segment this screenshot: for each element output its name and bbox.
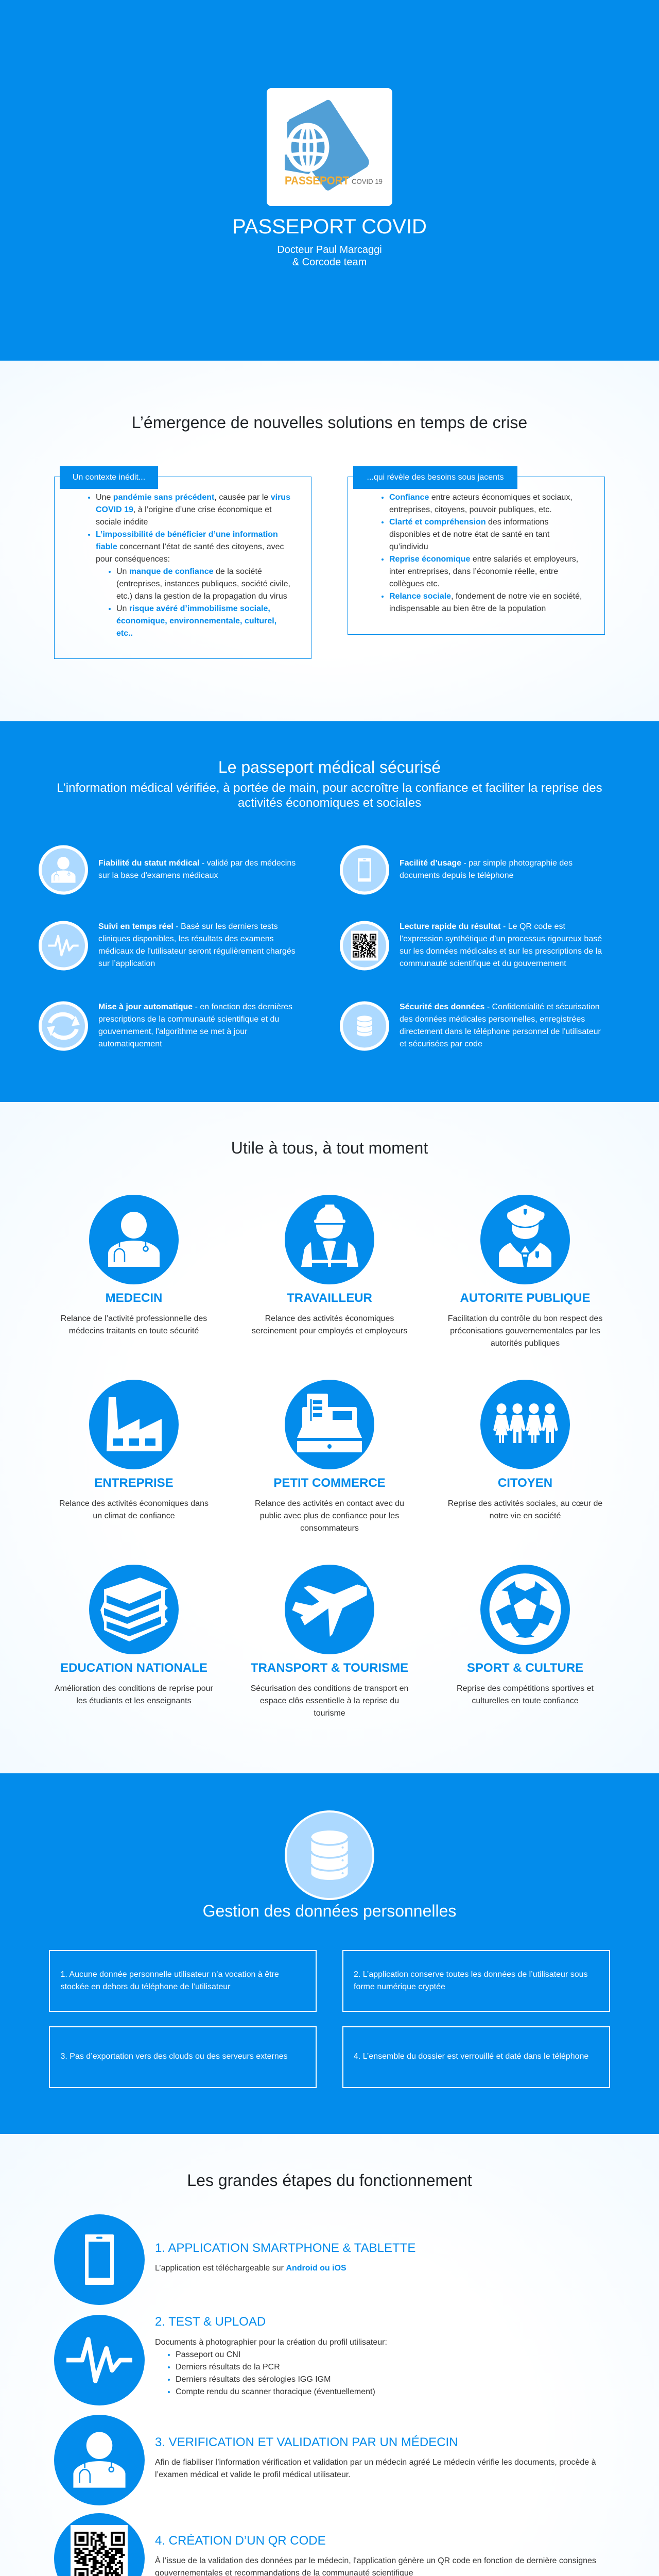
icon: usine — [89, 1380, 179, 1469]
panel: besoins — [348, 477, 605, 635]
description: public avec plus de confiance pour les — [260, 1512, 399, 1520]
panel: étapes — [0, 2134, 659, 2576]
step 4 text: À l’issue de la validation des données par le médecin, l'application génère un QR code en fonction de dernière consignes — [155, 2556, 596, 2565]
description — [448, 1499, 602, 1520]
step 3 text: Afin de fiabiliser l’information vérification et validation par un médecin agréé Le médecin vérifie les documents, procède à — [155, 2458, 596, 2467]
text 4: 4. L’ensemble du dossier est verrouillé et daté dans le téléphone — [354, 2052, 588, 2061]
title: MEDECIN — [106, 1291, 162, 1305]
panel: contexte — [54, 477, 311, 659]
title: PASSEPORT COVID — [232, 215, 427, 238]
card: sport et culture — [438, 1565, 613, 1699]
card: éducation nationale — [55, 1565, 213, 1705]
text 3: 3. Pas d’exportation vers des clouds ou des serveurs externes — [61, 2052, 288, 2061]
list: besoins: Confiance entre acteurs économiques et sociaux, — [389, 493, 573, 502]
list: besoins: Relance sociale, fondement de notre vie en société, — [389, 592, 582, 601]
panel: nouvelles solutions — [0, 361, 659, 721]
title: AUTORITE PUBLIQUE — [460, 1291, 590, 1305]
list: besoins: disponibles et de notre état de santé en tant — [389, 530, 549, 539]
description: tourisme — [314, 1709, 345, 1718]
list: besoins: inter entreprises, dans l’économie réelle, entre — [389, 567, 558, 576]
icon: base de données — [284, 1810, 375, 1900]
subtitle: & Corcode team — [292, 257, 367, 268]
label: besoins: ...qui révèle des besoins sous jacents — [367, 473, 504, 482]
icon: téléphone — [340, 845, 389, 894]
logo card — [267, 88, 392, 206]
step 1 text: L’application est téléchargeable sur Android ou iOS — [155, 2264, 346, 2273]
list: besoins — [381, 493, 582, 613]
text: suivi: cliniques disponibles, les résultats des examens — [98, 935, 274, 943]
list: contexte: Une pandémie sans précédent, causée par le virus — [96, 493, 290, 502]
card: médecin — [61, 1195, 207, 1335]
text: suivi: Suivi en temps réel - Basé sur les derniers tests — [98, 922, 278, 931]
description: Relance des activités économiques dans — [59, 1499, 209, 1508]
text 2: 2. L’application conserve toutes les données de l’utilisateur sous — [354, 1970, 588, 1979]
text: lecture: communauté scientifique et du gouvernement — [400, 959, 566, 968]
card: autorité publique — [448, 1195, 602, 1348]
card: transport et tourisme — [251, 1565, 408, 1718]
text 1 — [61, 1969, 279, 1993]
description — [438, 1683, 613, 1707]
text: lecture — [400, 922, 602, 968]
heading: L’émergence de nouvelles solutions en temps de crise — [132, 413, 527, 432]
text: fiabilité: sur la base d'examens médicaux — [98, 871, 218, 880]
heading: Gestion des données personnelles — [203, 1902, 456, 1920]
description: consommateurs — [300, 1524, 359, 1533]
icon: policier — [480, 1195, 570, 1284]
list: contexte: etc.) dans la gestion de la propagation du virus — [116, 592, 287, 601]
step 2 text: Derniers résultats des sérologies IGG IGM — [176, 2375, 331, 2384]
step 2 text — [155, 2336, 387, 2398]
text: fiabilité — [98, 859, 296, 880]
description: Facilitation du contrôle du bon respect des — [448, 1314, 602, 1323]
label: besoins — [353, 466, 517, 489]
panel: gestion des données — [0, 1773, 659, 2134]
description: préconisations gouvernementales par les — [450, 1327, 600, 1335]
icon: livres — [89, 1565, 179, 1654]
heading: Utile à tous, à tout moment — [231, 1139, 428, 1157]
text: fiabilité: Fiabilité du statut médical - validé par des médecins — [98, 859, 296, 868]
logo card: PASSEPORT — [285, 174, 350, 187]
icon: smartphone — [54, 2214, 145, 2305]
list: besoins: Reprise économique entre salariés et employeurs, — [389, 555, 578, 564]
description — [242, 1683, 417, 1720]
icon: QR code — [54, 2513, 145, 2576]
card: travailleur — [252, 1195, 407, 1335]
box 1 — [49, 1950, 317, 2012]
icon: pouls — [39, 921, 88, 971]
subheading: activités économiques et sociales — [238, 796, 421, 810]
description — [448, 1314, 602, 1348]
subtitle — [277, 244, 382, 268]
description: autorités publiques — [491, 1339, 560, 1348]
list: contexte — [88, 493, 290, 638]
step 2 text: Derniers résultats de la PCR — [176, 2363, 280, 2371]
step 4 text — [155, 2555, 596, 2576]
step 2 title: 2. TEST & UPLOAD — [155, 2315, 266, 2329]
subheading: L’information médical vérifiée, à portée de main, pour accroître la confiance et faciliter la reprise des — [57, 781, 602, 795]
text: sécurité: des données médicales personnelles, enregistrées — [400, 1015, 585, 1024]
text 1: stockée en dehors du téléphone de l’utilisateur — [61, 1982, 231, 1991]
icon: base de données — [340, 1002, 389, 1051]
list: contexte: pour conséquences: — [96, 555, 170, 564]
list: contexte: sociale inédite — [96, 518, 148, 527]
card: citoyen — [448, 1380, 602, 1520]
text: suivi: sur l’application — [98, 959, 155, 968]
title: EDUCATION NATIONALE — [60, 1661, 207, 1675]
text: mise à jour: Mise à jour automatique - en fonction des dernières — [98, 1003, 292, 1011]
text 2 — [354, 1969, 588, 1993]
icon: citoyens — [480, 1380, 570, 1469]
list: contexte: Un manque de confiance de la société — [116, 567, 262, 576]
title: TRAVAILLEUR — [287, 1291, 372, 1305]
heading: Le passeport médical sécurisé — [218, 758, 441, 776]
text: mise à jour — [98, 1003, 292, 1048]
panel: utile à tous — [0, 1102, 659, 1773]
step 4 title: 4. CRÉATION D’UN QR CODE — [155, 2534, 326, 2548]
icon: caisse enregistreuse — [285, 1380, 374, 1469]
description: un climat de confiance — [93, 1512, 175, 1520]
list: besoins: indispensable au bien être de la population — [389, 604, 546, 613]
text: facilité: Facilité d’usage - par simple photographie des — [400, 859, 573, 868]
text: sécurité: directement dans le téléphone personnel de l'utilisateur — [400, 1027, 601, 1036]
card: petit commerce — [255, 1380, 404, 1533]
title: SPORT & CULTURE — [467, 1661, 583, 1675]
title: ENTREPRISE — [94, 1476, 174, 1490]
step 3 text — [155, 2456, 596, 2481]
text 1: 1. Aucune donnée personnelle utilisateur n’a vocation à être — [61, 1970, 279, 1979]
list: contexte: Un risque avéré d’immobilisme sociale, — [116, 604, 270, 613]
text: mise à jour: gouvernement, l'algorithme se met à jour — [98, 1027, 247, 1036]
list: besoins: Clarté et compréhension des informations — [389, 518, 548, 527]
step 2 text: Documents à photographier pour la création du profil utilisateur: — [155, 2338, 387, 2347]
icon: QR code — [340, 921, 389, 971]
description: Amélioration des conditions de reprise pour — [55, 1684, 213, 1693]
description — [59, 1499, 209, 1520]
list: contexte: etc.. — [116, 629, 133, 638]
description: Relance des activités économiques — [265, 1314, 394, 1323]
text: lecture: l’expression synthétique d’un processus rigoureux basé — [400, 935, 602, 943]
description: culturelles en toute confiance — [472, 1697, 579, 1705]
step 3 title: 3. VERIFICATION ET VALIDATION PAR UN MÉDECIN — [155, 2435, 458, 2449]
step 2 text: Compte rendu du scanner thoracique (éventuellement) — [176, 2387, 375, 2396]
icon: travailleur — [285, 1195, 374, 1284]
description: Reprise des compétitions sportives et — [457, 1684, 594, 1693]
title: PETIT COMMERCE — [273, 1476, 386, 1490]
text: facilité — [400, 859, 573, 880]
icon: pouls — [54, 2315, 145, 2405]
subtitle: Docteur Paul Marcaggi — [277, 244, 382, 256]
description: Relance des activités en contact avec du — [255, 1499, 404, 1508]
text: facilité: documents depuis le téléphone — [400, 871, 514, 880]
icon: avion — [285, 1565, 374, 1654]
list: contexte: L’impossibilité de bénéficier d’une information — [96, 530, 278, 539]
box 3 — [49, 2026, 317, 2088]
description: Sécurisation des conditions de transport en — [251, 1684, 408, 1693]
text: mise à jour: automatiquement — [98, 1040, 162, 1048]
box 4 — [342, 2026, 610, 2088]
icon: mise à jour — [39, 1002, 88, 1051]
description: espace clôs essentielle à la reprise du — [260, 1697, 399, 1705]
description: Reprise des activités sociales, au cœur de — [448, 1499, 602, 1508]
description: les étudiants et les enseignants — [76, 1697, 192, 1705]
icon: médecin — [39, 845, 88, 894]
text: lecture: Lecture rapide du résultat - Le QR code est — [400, 922, 565, 931]
step 2 text: Passeport ou CNI — [176, 2350, 240, 2359]
text: sécurité: Sécurité des données - Confidentialité et sécurisation — [400, 1003, 600, 1011]
label: contexte — [60, 466, 158, 489]
step 1 title: 1. APPLICATION SMARTPHONE & TABLETTE — [155, 2241, 415, 2255]
description — [55, 1684, 213, 1705]
description: médecins traitants en toute sécurité — [69, 1327, 199, 1335]
list: besoins: entreprises, citoyens, pouvoir publiques, etc. — [389, 505, 552, 514]
list: besoins: collègues etc. — [389, 580, 440, 588]
list: contexte: fiable concernant l’état de santé des citoyens, avec — [96, 543, 284, 551]
description — [61, 1314, 207, 1335]
description: sereinement pour employés et employeurs — [252, 1327, 407, 1335]
text: lecture: sur les données médicales et sur les prescriptions de la — [400, 947, 602, 956]
title: TRANSPORT & TOURISME — [251, 1661, 408, 1675]
text: suivi: médicaux de l'utilisateur seront régulièrement chargés — [98, 947, 296, 956]
text: mise à jour: prescriptions de la communauté scientifique et du — [98, 1015, 279, 1024]
description: notre vie en société — [490, 1512, 561, 1520]
list: contexte: (entreprises, instances publiques, société civile, — [116, 580, 290, 588]
panel: passeport médical — [0, 721, 659, 1102]
description — [252, 1314, 407, 1335]
text: sécurité — [400, 1003, 601, 1048]
label: contexte: Un contexte inédit... — [73, 473, 145, 482]
card: entreprise — [59, 1380, 209, 1520]
list: besoins: qu’individu — [389, 543, 428, 551]
description: Relance de l’activité professionnelle des — [61, 1314, 207, 1323]
step 3 text: l’examen médical et valide le profil médical utilisateur. — [155, 2470, 351, 2479]
logo card: COVID 19 — [352, 177, 383, 185]
icon: ballon — [480, 1565, 570, 1654]
title: CITOYEN — [498, 1476, 552, 1490]
text 2: forme numérique cryptée — [354, 1982, 445, 1991]
description — [255, 1499, 404, 1533]
text: suivi — [98, 922, 296, 968]
icon: médecin — [89, 1195, 179, 1284]
icon: médecin — [54, 2415, 145, 2505]
box 2 — [342, 1950, 610, 2012]
heading: Les grandes étapes du fonctionnement — [187, 2171, 472, 2190]
text: sécurité: et sécurisées par code — [400, 1040, 482, 1048]
list: contexte: COVID 19, à l’origine d’une crise économique et — [96, 505, 272, 514]
subheading — [57, 781, 602, 810]
list: contexte: économique, environnementale, culturel, — [116, 617, 276, 625]
panel: hero — [0, 0, 659, 361]
